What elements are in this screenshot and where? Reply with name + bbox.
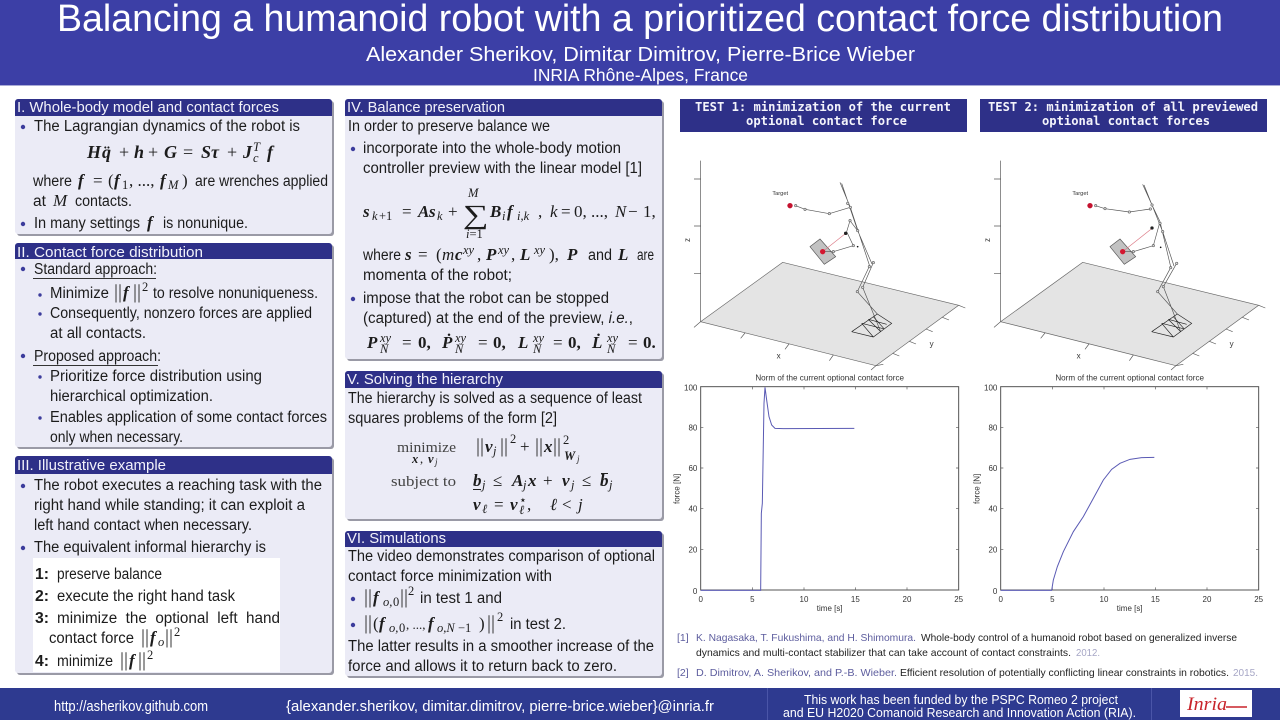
footer emails: {alexander.sherikov, dimitar.dimitrov, pierre-brice.wieber}@inria.fr <box>286 699 714 715</box>
equation: linear model: i <box>502 209 506 223</box>
panel IV: balance preservation: c <box>455 245 463 264</box>
equation: dynamics: H <box>86 142 102 162</box>
panel V: solving the hierarchy <box>345 371 664 521</box>
panel II: contact force distribution <box>15 243 334 449</box>
equation: least squares problem: + <box>520 437 530 456</box>
force chart: test 2: time [s] <box>1117 604 1143 613</box>
force chart: test 2: 20 <box>1203 595 1212 604</box>
force chart: test 1: time [s] <box>817 604 843 613</box>
equation: linear model: +1 <box>379 209 392 223</box>
informal hierarchy list <box>33 558 280 672</box>
references: K. Nagasaka, T. Fukushima, and H. Shimomura. <box>696 632 916 644</box>
heading VI: VI. Simulations <box>347 530 446 547</box>
equation: least squares problem: v <box>485 437 493 456</box>
panel IV: balance preservation: xy <box>462 243 475 257</box>
force chart: test 2: Norm of the current optional contact force <box>1055 374 1205 383</box>
panel I: whole-body model: f <box>78 171 86 190</box>
funding note: This work has been funded by the PSPC Romeo 2 project <box>804 692 1118 707</box>
force chart: test 1: 80 <box>688 423 698 432</box>
3D robot plot: test 2 <box>983 161 1265 370</box>
panel VI: simulations: in test 1 and <box>420 590 502 607</box>
force chart: test 2: 20 <box>988 545 998 554</box>
panel II: contact force distribution: Prioritize force distribution using <box>50 368 262 385</box>
equation: linear model: k <box>550 202 558 221</box>
panel VI: simulations: 2 <box>497 610 503 624</box>
equation: linear model: − <box>628 202 638 221</box>
equation: dynamics: τ <box>211 142 220 162</box>
panel IV: balance preservation: xy <box>533 243 546 257</box>
panel I: whole-body model: In many settings <box>34 215 140 232</box>
panel II: contact force distribution: 2 <box>142 280 148 294</box>
robot skeleton <box>1087 184 1192 337</box>
equation: dynamics: h <box>134 142 144 162</box>
informal hierarchy list: f <box>150 628 158 647</box>
equation: least squares problem: , <box>420 452 423 466</box>
informal hierarchy list: preserve balance <box>57 566 162 583</box>
informal hierarchy list: execute the right hand task <box>57 588 235 605</box>
panel I: whole-body model: M <box>52 191 68 210</box>
equation: least squares problem: || <box>535 435 543 457</box>
panel I: whole-body model: ) <box>182 171 188 190</box>
equation: dynamics: S <box>201 142 211 162</box>
test 1 heading <box>680 99 967 132</box>
references: 2015. <box>1233 667 1258 679</box>
force chart: test 2: 0 <box>993 587 998 596</box>
force chart: test 1: 0 <box>698 595 703 604</box>
equation: capture constraints: xy <box>532 331 545 345</box>
references: 2012. <box>1076 647 1100 659</box>
equation: capture constraints: xy <box>454 331 467 345</box>
references: dynamics and multi-contact stabilizer that can take account of contact constraints. <box>696 647 1071 659</box>
force chart: test 2: 40 <box>988 505 998 514</box>
panel IV: balance preservation: incorporate into the whole-body motion <box>363 140 621 157</box>
icon: Inria logo: Inria <box>1186 694 1227 715</box>
equation: dynamics: J <box>242 142 253 162</box>
panel V: solving the hierarchy: The hierarchy is solved as a sequence of least <box>348 390 643 407</box>
equation: least squares problem: ≤ <box>493 471 502 490</box>
equation: least squares problem: = <box>494 495 504 514</box>
panel III: illustrative example: right hand while standing; it can exploit a <box>34 497 305 514</box>
panel IV: balance preservation <box>345 99 664 361</box>
footer bar <box>0 688 1280 720</box>
panel II: contact force distribution: f <box>123 283 131 302</box>
icon: Inria logo <box>1180 690 1252 717</box>
force chart: test 1: 0 <box>693 587 698 596</box>
panel VI: simulations: || <box>364 586 372 608</box>
panel I: whole-body model: f <box>147 213 155 232</box>
panel IV: balance preservation: ), <box>549 245 559 264</box>
force chart: test 1: 10 <box>800 595 809 604</box>
equation: capture constraints: N <box>379 342 389 356</box>
equation: capture constraints: 0, <box>493 333 506 352</box>
panel IV: balance preservation: , <box>477 245 481 264</box>
panel IV: balance preservation: , <box>511 245 515 264</box>
equation: least squares problem: 2 <box>563 433 569 447</box>
panel III: illustrative example: left hand contact when necessary. <box>34 517 252 534</box>
panel II: contact force distribution: only when necessary. <box>50 429 183 446</box>
3D robot plot: test 1: Target <box>772 191 788 197</box>
equation: least squares problem: j <box>434 457 438 467</box>
equation: linear model: s <box>362 202 370 221</box>
panel II: contact force distribution: to resolve nonuniqueness. <box>153 285 318 302</box>
force chart: test 1: force [N] <box>673 474 682 504</box>
panel VI: simulations: contact force minimization with <box>348 568 552 585</box>
panel VI: simulations: ) <box>479 614 485 633</box>
equation: least squares problem <box>391 432 613 517</box>
panel I: whole-body model: M <box>167 178 179 192</box>
panel IV: balance preservation: controller preview with the linear model [1] <box>363 160 642 177</box>
panel IV: balance preservation: (captured) at the end of the preview, i.e., <box>363 310 633 327</box>
test 2 heading: TEST 2: minimization of all previewed <box>988 100 1258 114</box>
panel II: contact force distribution: Minimize <box>50 285 109 302</box>
equation: least squares problem: ℓ <box>519 503 524 517</box>
panel I: whole-body model: , ..., <box>129 171 159 190</box>
panel IV: balance preservation: P <box>485 245 497 264</box>
heading I: I. Whole-body model and contact forces <box>17 99 279 116</box>
equation: dynamics: q̈ <box>102 142 111 162</box>
equation: capture constraints: 0, <box>568 333 581 352</box>
panel II: contact force distribution: Consequently, nonzero forces are applied <box>50 305 312 322</box>
equation: least squares problem: ⋆ <box>519 493 527 507</box>
informal hierarchy list: o <box>158 635 164 649</box>
equation: capture constraints: 0, <box>418 333 431 352</box>
3D robot plot: test 2: z <box>983 238 992 242</box>
3D robot plot: test 2: y <box>1230 339 1234 348</box>
equation: dynamics: T <box>253 140 261 154</box>
panel I: whole-body model: contacts. <box>75 193 132 210</box>
panel IV: balance preservation: momenta of the robot; <box>363 267 512 284</box>
force chart: test 1: 100 <box>684 384 698 393</box>
force chart: test 1 <box>673 374 964 613</box>
equation: capture constraints: = <box>553 333 563 352</box>
equation: least squares problem: ≤ <box>582 471 591 490</box>
panel III: illustrative example: The equivalent informal hierarchy is <box>34 539 266 556</box>
equation: linear model: 0, ..., <box>574 202 608 221</box>
3D robot plot: test 1: z <box>683 238 692 242</box>
panel VI: simulations: o, <box>383 595 392 609</box>
panel IV: balance preservation: and <box>588 247 612 264</box>
equation: capture constraints: N <box>454 342 464 356</box>
equation: linear model: N <box>614 202 628 221</box>
panel V: solving the hierarchy: squares problems of the form [2] <box>348 410 557 427</box>
equation: least squares problem: || <box>553 435 561 457</box>
footer url: http://asherikov.github.com <box>54 699 208 715</box>
panel IV: balance preservation: P <box>566 245 578 264</box>
panel II: contact force distribution: Enables application of some contact forces <box>50 409 327 426</box>
equation: capture constraints: 0. <box>643 333 656 352</box>
informal hierarchy list: 2: <box>35 588 49 605</box>
references: Efficient resolution of potentially conflicting linear constraints in robotics. <box>900 667 1229 679</box>
informal hierarchy list: 1: <box>35 566 49 583</box>
equation: capture constraints: = <box>628 333 638 352</box>
panel IV: balance preservation: are <box>637 247 654 264</box>
top banner <box>0 0 1280 86</box>
equation: least squares problem: b <box>473 471 482 490</box>
equation: capture constraints: L̇ <box>591 333 602 352</box>
informal hierarchy list: || <box>141 626 149 648</box>
panel IV: balance preservation: where <box>362 247 401 264</box>
heading V: V. Solving the hierarchy <box>347 371 503 388</box>
equation: least squares problem: j <box>491 444 497 458</box>
force chart: test 2: 60 <box>988 464 998 473</box>
informal hierarchy list: 3: <box>35 610 49 627</box>
panel VI: simulations: The latter results in a smoother increase of the <box>348 638 654 655</box>
equation: capture constraints: N <box>532 342 542 356</box>
equation: linear model: 1, <box>643 202 656 221</box>
equation: linear model: B <box>489 202 501 221</box>
equation: least squares problem: A <box>511 471 523 490</box>
informal hierarchy list: 2 <box>147 648 153 662</box>
3D robot plot: test 1: y <box>930 339 934 348</box>
references: [1] <box>677 632 689 644</box>
equation: capture constraints: N <box>606 342 616 356</box>
force chart: test 2: force [N] <box>973 474 982 504</box>
equation: linear model: A <box>417 202 429 221</box>
panel I: whole-body model: are wrenches applied <box>195 173 328 190</box>
panel IV: balance preservation: = <box>418 245 428 264</box>
informal hierarchy list: contact force <box>49 630 134 647</box>
panel IV: balance preservation: impose that the robot can be stopped <box>363 290 609 307</box>
panel II: contact force distribution: at all contacts. <box>50 325 146 342</box>
test 1 heading: optional contact force <box>746 114 907 128</box>
informal hierarchy list: f <box>129 651 137 670</box>
panel IV: balance preservation: xy <box>497 243 510 257</box>
equation: capture constraints: L <box>517 333 528 352</box>
equation: least squares problem: v <box>562 471 570 490</box>
authors: Alexander Sherikov, Dimitar Dimitrov, Pierre-Brice Wieber <box>366 43 915 66</box>
panel VI: simulations: || <box>400 586 408 608</box>
panel VI: simulations: ( <box>373 614 379 633</box>
robot skeleton <box>787 182 892 337</box>
panel VI: simulations: 0 <box>399 621 405 635</box>
panel VI: simulations: , ..., <box>406 617 426 632</box>
heading III: III. Illustrative example <box>17 457 166 474</box>
force chart: test 2: 10 <box>1100 595 1109 604</box>
panel VI: simulations: force and allows it to return back to zero. <box>348 658 617 675</box>
equation: dynamics: + <box>227 142 237 162</box>
force chart: test 2: 0 <box>998 595 1003 604</box>
force chart: test 2: 25 <box>1254 595 1264 604</box>
panel II: contact force distribution: || <box>133 281 141 303</box>
force chart: test 1: 20 <box>903 595 912 604</box>
equation: least squares problem: v <box>473 495 481 514</box>
equation: least squares problem: b <box>600 471 608 490</box>
force chart: test 1: 20 <box>688 545 698 554</box>
panel I: whole-body model: The Lagrangian dynamics of the robot is <box>34 118 300 135</box>
panel IV: balance preservation: In order to preserve balance we <box>348 118 550 135</box>
panel I: whole-body model: is nonunique. <box>163 215 248 232</box>
informal hierarchy list: 2 <box>174 625 180 639</box>
panel IV: balance preservation: s <box>404 245 412 264</box>
equation: linear model: = <box>402 202 412 221</box>
force chart: test 1: 15 <box>851 595 860 604</box>
panel I: whole-body model: where <box>32 173 72 190</box>
equation: least squares problem: j <box>521 478 527 492</box>
panel VI: simulations: o, <box>389 621 398 635</box>
equation: linear model: s <box>428 202 436 221</box>
3D robot plot: test 2: x <box>1077 352 1081 361</box>
panel VI: simulations: || <box>364 612 372 634</box>
footer bar: and EU H2020 Comanoid Research and Innovation Action (RIA). <box>783 705 1136 720</box>
equation: least squares problem: x <box>543 437 553 456</box>
references <box>677 632 1258 679</box>
affiliation: INRIA Rhône-Alpes, France <box>533 65 748 85</box>
equation: least squares problem: v <box>428 452 434 466</box>
equation: linear model: k <box>372 209 378 223</box>
panel I: whole-body model <box>15 99 334 236</box>
equation: dynamics: G <box>164 142 177 162</box>
equation: capture constraints: xy <box>379 331 392 345</box>
informal hierarchy list: minimize the optional left hand <box>57 610 280 627</box>
equation: linear model: i=1 <box>466 227 483 241</box>
panel III: illustrative example <box>15 456 334 675</box>
equation: least squares problem: ℓ <box>550 495 557 514</box>
panel II: contact force distribution: || <box>114 281 122 303</box>
force chart: test 2 <box>973 374 1264 613</box>
force chart: test 2: 80 <box>988 423 998 432</box>
equation: dynamics: + <box>148 142 158 162</box>
equation: least squares problem: x <box>411 452 418 466</box>
panel III: illustrative example: The robot executes a reaching task with the <box>34 477 322 494</box>
panel I: whole-body model: f <box>114 171 122 190</box>
equation: least squares problem: x <box>527 471 537 490</box>
panel I: whole-body model: f <box>160 171 168 190</box>
informal hierarchy list: minimize <box>57 653 113 670</box>
equation: linear model: ∑ <box>463 200 489 229</box>
equation: least squares problem: || <box>500 435 508 457</box>
informal hierarchy list: || <box>165 626 173 648</box>
informal hierarchy list: 4: <box>35 653 49 670</box>
equation: least squares problem: ℓ <box>482 502 487 516</box>
equation: dynamics: + <box>119 142 129 162</box>
panel VI: simulations: in test 2. <box>510 616 566 633</box>
informal hierarchy list: || <box>138 649 146 671</box>
equation: capture constraints: = <box>402 333 412 352</box>
heading II: II. Contact force distribution <box>17 244 203 261</box>
informal hierarchy list: || <box>120 649 128 671</box>
panel IV: balance preservation: ( <box>436 245 442 264</box>
force chart: test 2: 5 <box>1050 595 1055 604</box>
force chart: test 1: 60 <box>688 464 698 473</box>
equation: linear model <box>362 186 656 241</box>
references: [2] <box>677 667 689 679</box>
equation: least squares problem: 2 <box>510 432 516 446</box>
equation: linear model: M <box>467 186 479 200</box>
equation: linear model: = <box>561 202 571 221</box>
panel VI: simulations: || <box>487 612 495 634</box>
panel VI: simulations: −1 <box>458 621 471 635</box>
equation: least squares problem: v <box>510 495 518 514</box>
equation: least squares problem: minimize <box>397 440 456 456</box>
equation: least squares problem: j <box>569 478 575 492</box>
equation: capture constraints: = <box>478 333 488 352</box>
panel II: contact force distribution: hierarchical optimization. <box>50 388 213 405</box>
equation: dynamics: = <box>183 142 193 162</box>
test 1 heading: TEST 1: minimization of the current <box>695 100 951 114</box>
force chart: test 1: Norm of the current optional contact force <box>755 374 905 383</box>
panel VI: simulations: f <box>373 588 381 607</box>
equation: least squares problem: + <box>543 471 553 490</box>
heading IV: IV. Balance preservation <box>347 99 505 116</box>
force chart: test 1: 25 <box>954 595 964 604</box>
equation: linear model: + <box>448 202 458 221</box>
equation: dynamics: f <box>267 142 275 162</box>
equation: capture constraints: Ṗ <box>441 333 453 352</box>
panel I: whole-body model: = <box>93 171 103 190</box>
panel VI: simulations: o,N <box>437 621 455 635</box>
panel II: contact force distribution: Proposed approach: <box>34 348 161 365</box>
equation: least squares problem: subject to <box>391 474 456 490</box>
equation: least squares problem: < <box>562 495 572 514</box>
panel IV: balance preservation: L <box>617 245 628 264</box>
panel I: whole-body model: ( <box>108 171 114 190</box>
3D robot plot: test 1: x <box>777 352 781 361</box>
panel VI: simulations <box>345 530 664 678</box>
panel IV: balance preservation: m <box>442 245 454 264</box>
panel VI: simulations: The video demonstrates comparison of optional <box>348 548 655 565</box>
equation: linear model: , <box>538 202 542 221</box>
3D robot plot: test 1 <box>683 161 965 370</box>
equation: least squares problem: j <box>576 495 583 514</box>
force chart: test 2: 15 <box>1151 595 1160 604</box>
equation: least squares problem: W <box>564 449 576 463</box>
equation: least squares problem: , <box>527 495 531 514</box>
equation: capture constraints: P <box>366 333 378 352</box>
panel VI: simulations: f <box>379 614 387 633</box>
equation: least squares problem: j <box>607 478 613 492</box>
3D robot plot: test 2: Target <box>1072 191 1088 197</box>
equation: linear model: i,k <box>517 209 530 223</box>
equation: capture constraints: xy <box>606 331 619 345</box>
equation: least squares problem: j <box>480 478 486 492</box>
panel I: whole-body model: at <box>33 193 47 210</box>
panel VI: simulations: 2 <box>408 584 414 598</box>
test 2 heading <box>980 99 1267 132</box>
panel II: contact force distribution: Standard approach: <box>34 261 157 278</box>
force chart: test 2: 100 <box>984 384 998 393</box>
equation: linear model: f <box>507 202 515 221</box>
equation: least squares problem: || <box>476 435 484 457</box>
panel VI: simulations: 0 <box>393 595 399 609</box>
panel I: whole-body model: 1 <box>122 178 128 192</box>
references: D. Dimitrov, A. Sherikov, and P.-B. Wieber. <box>696 667 897 679</box>
equation: least squares problem: j <box>576 454 580 464</box>
force chart: test 1: 5 <box>750 595 755 604</box>
panel VI: simulations: f <box>428 614 436 633</box>
equation: linear model: k <box>437 209 443 223</box>
test 2 heading: optional contact forces <box>1042 114 1210 128</box>
equation: dynamics: c <box>253 151 259 165</box>
panel IV: balance preservation: L <box>519 245 530 264</box>
references: Whole-body control of a humanoid robot based on generalized inverse <box>921 632 1237 644</box>
force chart: test 1: 40 <box>688 505 698 514</box>
